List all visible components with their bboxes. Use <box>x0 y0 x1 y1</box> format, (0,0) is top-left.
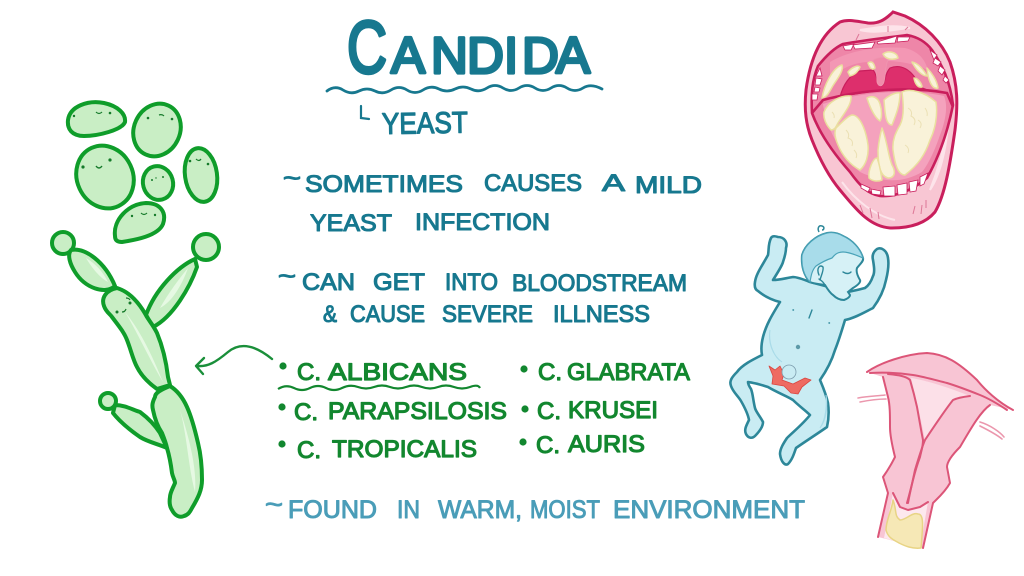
species list: PARAPSILOSIS <box>328 398 507 425</box>
title: Candida <box>347 6 590 89</box>
species list: C. <box>297 437 321 464</box>
species list: GLABRATA <box>567 359 690 386</box>
title: Candida: ANDIDA <box>391 27 590 84</box>
body shading <box>770 330 827 428</box>
outlines <box>867 353 1013 548</box>
hair <box>802 233 863 282</box>
uvula <box>873 57 888 86</box>
text block: warm moist environment <box>265 491 805 524</box>
subheading: yeast: YEAST <box>382 107 468 141</box>
species list: TROPICALIS <box>332 436 477 463</box>
species list: C. <box>538 359 562 386</box>
illustration: yeast cells <box>66 96 221 242</box>
vaginal canal <box>884 493 928 548</box>
cavity <box>911 378 970 440</box>
illustration: uterus with vaginal candidiasis <box>858 353 1013 548</box>
hair curl <box>818 226 824 232</box>
ligaments <box>858 395 1004 439</box>
illustration: mouth with oral thrush <box>805 12 957 228</box>
palate highlight <box>830 48 928 80</box>
text block: bloodstream illness: & <box>323 301 337 328</box>
species list: C. <box>294 399 318 426</box>
face details <box>793 266 851 349</box>
text block: bloodstream illness: SEVERE <box>442 301 533 328</box>
head <box>802 233 863 300</box>
teeth <box>812 36 949 196</box>
thrush plaques <box>824 96 851 130</box>
throat <box>840 67 930 97</box>
species list: AURIS <box>568 431 645 458</box>
text block: bloodstream illness: GET <box>373 269 425 296</box>
text block: bloodstream illness: CAUSE <box>350 301 425 328</box>
text block: warm moist environment: ~ <box>265 491 283 519</box>
illustration: baby with diaper rash <box>730 226 888 465</box>
crimson band at tongue root <box>812 89 953 113</box>
text block: bloodstream illness <box>278 263 687 328</box>
text block: mild yeast infection: INFECTION <box>415 209 550 236</box>
text block: bloodstream illness: CAN <box>302 269 355 296</box>
text block: warm moist environment: IN <box>397 496 420 524</box>
tongue <box>823 92 946 180</box>
lips <box>805 12 957 228</box>
diaper rash <box>769 365 811 394</box>
text block: warm moist environment: MOIST <box>530 496 600 524</box>
text block: warm moist environment: ENVIRONMENT <box>613 496 805 524</box>
text block: mild yeast infection: MILD <box>635 172 702 199</box>
text block: mild yeast infection: YEAST <box>310 210 392 237</box>
lip creases <box>856 26 926 219</box>
species list: C. <box>297 359 321 386</box>
text block: bloodstream illness: INTO <box>445 269 498 296</box>
lip highlights <box>842 26 948 220</box>
text block: bloodstream illness: ILLNESS <box>553 301 650 328</box>
text block: warm moist environment: WARM, <box>438 496 522 524</box>
species list <box>278 359 690 464</box>
species list: C. <box>536 432 560 459</box>
title wavy underline <box>327 86 602 93</box>
text block: mild yeast infection: SOMETIMES <box>305 171 463 198</box>
arrow: species to hyphae <box>196 346 272 374</box>
uterus body fill <box>867 353 1013 548</box>
text block: bloodstream illness: ~ <box>278 263 296 290</box>
plaque texture <box>832 108 927 158</box>
title: Candida: C <box>347 6 387 89</box>
species list: C. <box>537 398 561 425</box>
plaque <box>886 500 923 548</box>
text block: mild yeast infection: CAUSES <box>484 170 582 197</box>
species list: ALBICANS <box>328 359 467 386</box>
text block: bloodstream illness: BLOODSTREAM <box>512 270 687 297</box>
text block: mild yeast infection <box>283 165 702 237</box>
mouth interior <box>812 35 953 196</box>
text block: warm moist environment: FOUND <box>288 496 377 524</box>
body <box>730 236 888 465</box>
text block: mild yeast infection: A <box>602 170 625 197</box>
species list: KRUSEI <box>568 397 658 424</box>
text block: mild yeast infection: ~ <box>283 165 301 192</box>
illustration: hyphae <box>52 232 219 517</box>
